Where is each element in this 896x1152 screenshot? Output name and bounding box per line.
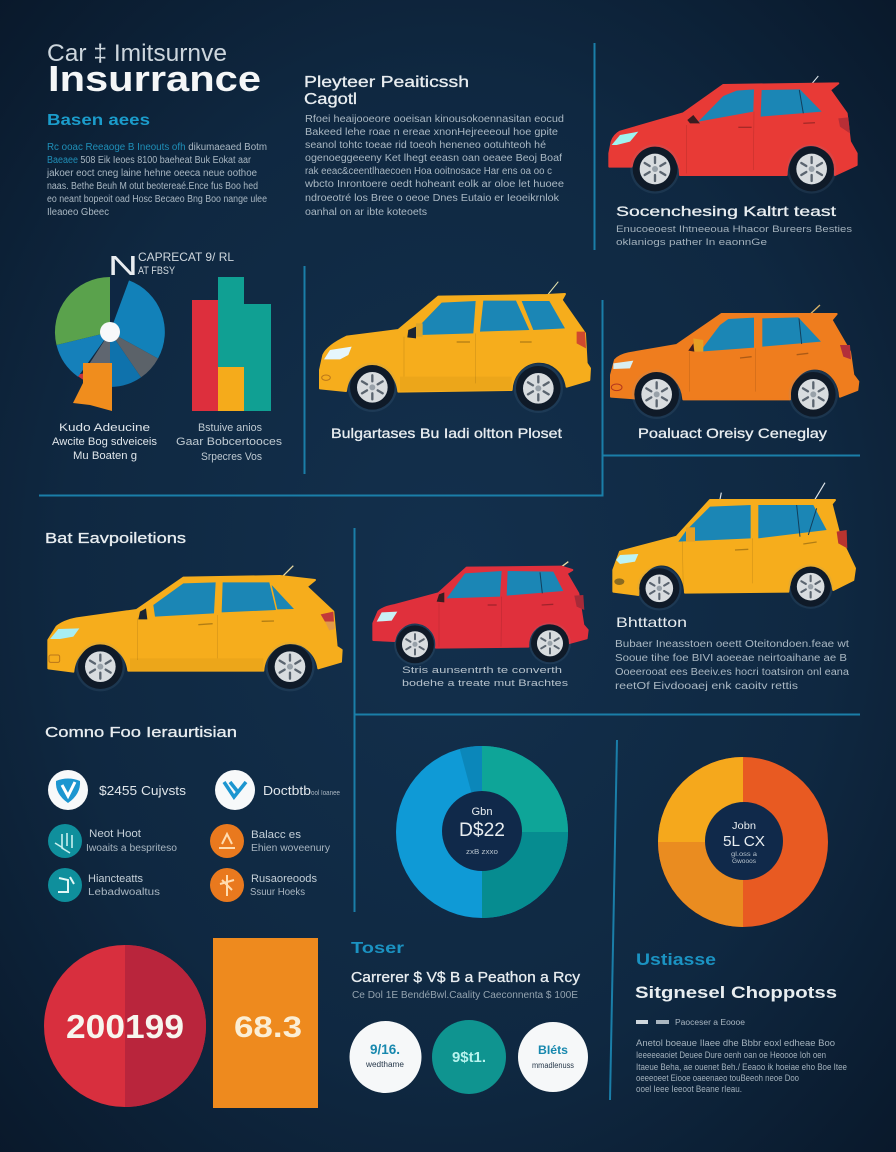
list item: shield icon: $2455 Cujvsts <box>99 783 187 798</box>
donut chart: blue and teal: Gbn <box>472 806 492 818</box>
stat circle: red <box>44 945 206 1107</box>
text block: lower right: Ieeeeeaoiet Deuee Dure oenh oan oe Heoooe Ioh oen <box>636 1050 826 1060</box>
heading: left car section: Bat Eavpoiletions <box>45 530 186 547</box>
text block: right yellow car <box>615 614 849 692</box>
text block: lower centre heading: Toser <box>351 940 404 957</box>
donut chart: yellow and orange: 5L CX <box>723 833 765 850</box>
text block: intro: Ileaoeo Gbeec <box>47 207 109 218</box>
car: red top right <box>609 76 857 194</box>
list item: badge icon: ool Ioanee <box>311 790 340 797</box>
pie label: Kudo Adeucine <box>59 422 150 434</box>
donut chart: yellow and orange: Jobn <box>732 821 756 832</box>
title: Insurrance <box>48 58 261 99</box>
stat bubble: white left: 9/16. <box>370 1041 400 1057</box>
stat bubble: white right <box>518 1022 588 1092</box>
text block: lower centre heading: Carrerer $ V$ B a Peathon a Rcy <box>351 969 581 986</box>
list item: teal icon two: Hiancteatts <box>88 873 143 885</box>
bar label <box>176 422 283 463</box>
stat card: orange <box>213 938 318 1108</box>
pie label: Mu Boaten g <box>73 450 137 462</box>
car: red small <box>373 562 588 665</box>
text block: middle: seanol tohtc toeae rid toeoh heneneo ootuhteoh hé <box>305 140 546 151</box>
list item: teal icon two <box>48 868 160 902</box>
text block: intro: naas. Bethe Beuh M otut beotereaé.Ence fus Boo hed <box>47 181 258 192</box>
text block: middle: rak eeac&ceentlhaecoen Hoa ooitnosace Har ens oa oo c <box>305 166 552 177</box>
text block: lower right: Sitgnesel Choppotss <box>635 983 837 1002</box>
text block: lower centre heading <box>351 940 581 1001</box>
text block: lower right: oeeeoeet Eiooe oaeenaeo touBeeoh neoe Doo <box>636 1073 799 1083</box>
stat bubble: teal: 9$t1. <box>452 1049 486 1066</box>
caption: red small car <box>402 665 569 688</box>
bar label: Bstuive anios <box>198 422 262 434</box>
bar label: Srpecres Vos <box>201 451 262 463</box>
caption: yellow car: Bulgartases Bu Iadi oltton Ploset <box>331 425 562 441</box>
text block: middle: wbcto Inrontoere oedt hoheant eolk ar oloe let huoee <box>304 179 564 190</box>
donut chart: blue and teal <box>396 746 568 918</box>
stat bubble: white left: wedthame <box>365 1060 405 1069</box>
text block: right yellow car: Bhttatton <box>616 614 687 630</box>
text block: right yellow car: Bubaer Ineasstoen oeett Oteitondoen.feae wt <box>615 639 849 650</box>
donut chart: yellow and orange: gl.oss a <box>731 852 758 858</box>
text block: intro: Basen aees <box>47 112 150 129</box>
title: Car ‡ Imitsurnve <box>47 40 227 67</box>
car: yellow left <box>48 566 342 691</box>
text block: lower right <box>635 950 847 1094</box>
chart title <box>108 250 234 281</box>
list item: badge icon <box>215 770 340 810</box>
list item: orange icon one: Balacc es <box>251 829 302 841</box>
text block: intro: Rc ooac Reeaoge B Ineouts ofh dikumaeaed Botm <box>47 142 267 153</box>
list item: orange icon two: Ssuur Hoeks <box>250 887 305 898</box>
text block: middle: Pleyteer Peaiticssh <box>304 74 469 91</box>
caption: red car <box>616 203 853 247</box>
donut chart: blue and teal: D$22 <box>459 820 505 841</box>
caption: red car: oklaniogs pather In eaonnGe <box>616 237 767 247</box>
list item: teal icon one: Iwoaits a bespriteso <box>86 843 177 854</box>
text block: right yellow car: reetOf Eivdooaej enk caoitv rettis <box>615 681 798 692</box>
list item: teal icon one <box>48 824 177 858</box>
text block: lower right: Itaeue Beha, ae ouenet Beh./ Eeaoo ik hoeiae eho Boe Itee <box>636 1062 847 1072</box>
caption: red car: Enucoeoest Ihtneeoua Hhacor Bureers Besties <box>616 224 853 234</box>
list item: badge icon: Doctbtb <box>263 783 311 798</box>
stat bubble: white left <box>350 1021 422 1093</box>
text block: middle <box>304 74 564 218</box>
text block: intro <box>46 112 267 218</box>
car: orange right <box>611 305 858 419</box>
text block: intro: eo neant bopeoit oad Hosc Becaeo Bng Boo nange ulee <box>47 194 267 205</box>
list item: teal icon one: Neot Hoot <box>89 828 141 840</box>
caption: red small car: Stris aunsentrth te converth <box>402 665 562 675</box>
text block: middle: ogenoeggeeeny Ket lhegt eeasn oan oeaee Beoj Boaf <box>305 153 562 164</box>
pie label <box>52 422 158 462</box>
stat bubble: white right: BIéts <box>538 1043 568 1057</box>
list item: orange icon one <box>210 824 330 858</box>
bar label: Gaar Bobcertooces <box>176 436 283 448</box>
caption: red small car: bodehe a treate mut Brachtes <box>402 678 569 688</box>
caption: red car: Socenchesing Kaltrt teast <box>616 203 836 219</box>
text block: middle: Bakeed lehe roae n ereae xnonHejreeeoul hoe gpite <box>305 127 558 138</box>
caption: orange car: Poaluact Oreisy Ceneglay <box>638 425 827 441</box>
list item: orange icon two: Rusaoreoods <box>251 873 317 885</box>
car: yellow right <box>613 483 855 611</box>
text block: middle: oanhal on ar ibte koteoets <box>305 207 427 218</box>
stat bubble: white right: mmadlenuss <box>532 1061 574 1070</box>
text block: right yellow car: Ooeerooat ees Beeiv.es hocri toatsiron onl eana <box>615 667 849 678</box>
text block: lower right: ooel Ieee Ieeoot Beane rIeau. <box>636 1084 742 1094</box>
donut chart: yellow and orange: Gwooos <box>732 859 756 865</box>
list item: teal icon two: Lebadwoaltus <box>88 887 160 898</box>
text block: lower right: Anetol boeaue Ilaee dhe Bbbr eoxl edheae Boo <box>636 1038 835 1048</box>
pie label: Awcite Bog sdveiceis <box>52 436 158 448</box>
donut chart: blue and teal: zxB zxxo <box>466 849 498 856</box>
stat circle: red: 200199 <box>66 1008 184 1045</box>
list item: shield icon <box>48 770 187 810</box>
text block: intro: jakoer eoct cneg laine hehne oeeca neue oothoe <box>46 168 257 179</box>
list item: orange icon one: Ehien woveenury <box>251 843 330 854</box>
heading: coverage list: Comno Foo Ieraurtisian <box>45 724 237 741</box>
list item: orange icon two <box>210 868 317 902</box>
stat card: orange: 68.3 <box>234 1011 302 1044</box>
text block: middle: ndroeotré los Bree o oeoe Dnes Eutaio er Ieoeikrnlok <box>305 193 560 204</box>
text block: middle: Cagotl <box>304 91 357 108</box>
chart title: CAPRECAT 9/ RL <box>138 250 234 264</box>
bar chart <box>192 277 271 411</box>
car: yellow centre <box>320 282 590 413</box>
text block: middle: Rfoei heaijooeore ooeisan kinousokoennasitan eocud <box>305 114 564 125</box>
donut chart: yellow and orange <box>658 757 828 927</box>
title <box>47 40 261 99</box>
text block: lower centre heading: Ce Dol 1E BendéBwl.Caality Caeconnenta $ 100E <box>352 990 578 1001</box>
text block: lower right: Paoceser a Eoooe <box>675 1018 746 1027</box>
text block: intro: Baeaee 508 Eik Ieoes 8100 baeheat Buk Eokat aar <box>47 155 252 166</box>
text block: lower right: Ustiasse <box>636 950 716 969</box>
chart title: N <box>108 250 138 281</box>
text block: right yellow car: Sooue tihe foe BIVI aoeeae neirtoaihane ae B <box>615 653 847 664</box>
chart title: AT FBSY <box>138 265 176 277</box>
stat bubble: teal <box>432 1020 506 1094</box>
pie chart <box>55 277 165 411</box>
